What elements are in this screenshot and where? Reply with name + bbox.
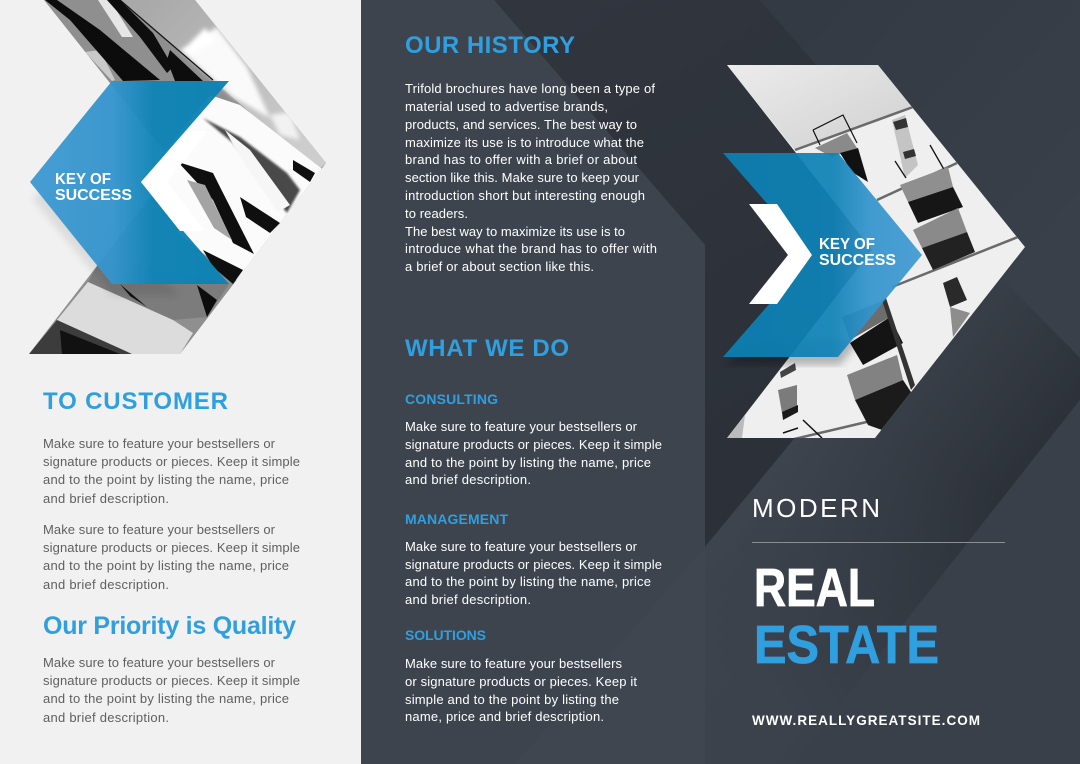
subheading: management: MANAGEMENT xyxy=(405,511,508,527)
divider rule xyxy=(752,542,1005,543)
left photo: building chevron xyxy=(20,0,330,360)
text block: solutions: simple and to the point by listing the xyxy=(405,692,619,707)
text block: consulting: Make sure to feature your bestsellers or xyxy=(405,419,638,434)
text block: history: material used to advertise brands, xyxy=(405,99,608,114)
text block: customer paragraph two: Make sure to feature your bestsellers or xyxy=(43,522,276,537)
panel: left background xyxy=(0,0,361,764)
text block: history: Trifold brochures have long been a type of xyxy=(405,81,655,96)
blue arrow shadow left xyxy=(32,180,180,296)
heading: what we do: WHAT WE DO xyxy=(405,335,569,362)
title: real: REAL xyxy=(754,558,875,618)
text block: management: and to the point by listing the name, price xyxy=(405,574,651,589)
subheading: consulting: CONSULTING xyxy=(405,391,498,407)
blue arrow left xyxy=(30,81,229,284)
text block: history: maximize its use is to introduce what the xyxy=(405,135,644,150)
text block: quality paragraph: signature products or pieces. Keep it simple xyxy=(43,673,300,688)
text block: quality paragraph xyxy=(43,655,300,725)
text block: customer paragraph two: and brief description. xyxy=(43,577,169,592)
text block: history: section like this. Make sure to keep your xyxy=(405,170,640,185)
text block: customer paragraph one: Make sure to feature your bestsellers or xyxy=(43,436,276,451)
label: key of success left: SUCCESS xyxy=(55,187,132,204)
subheading: solutions: SOLUTIONS xyxy=(405,627,486,643)
right photo: apartment balconies chevron xyxy=(720,60,1030,445)
label: key of success right xyxy=(819,236,896,269)
text block: customer paragraph two: and to the point by listing the name, price xyxy=(43,558,289,573)
text block: history: The best way to maximize its use is to xyxy=(405,224,625,239)
blue arrow shadow right xyxy=(723,340,860,365)
text block: management: Make sure to feature your bestsellers or xyxy=(405,539,638,554)
text block: customer paragraph one: and to the point by listing the name, price xyxy=(43,472,289,487)
heading: to customer: TO CUSTOMER xyxy=(43,388,228,415)
label: key of success left: KEY OF xyxy=(55,171,111,188)
text block: history: a brief or about section like this. xyxy=(405,259,594,274)
text block: customer paragraph one: and brief description. xyxy=(43,491,169,506)
text block: solutions: Make sure to feature your bestsellers xyxy=(405,656,622,671)
text block: history: products, and services. The best way to xyxy=(405,117,637,132)
text block: solutions xyxy=(405,656,637,724)
white chevron right xyxy=(749,204,812,304)
label: key of success left xyxy=(55,171,132,204)
text block: consulting: and brief description. xyxy=(405,472,531,487)
title: modern: MODERN xyxy=(752,493,880,523)
text block: solutions: name, price and brief description. xyxy=(405,709,604,724)
text block: history: to readers. xyxy=(405,206,468,221)
text block: quality paragraph: and to the point by listing the name, price xyxy=(43,691,289,706)
text block: history xyxy=(405,81,657,274)
text block: customer paragraph one xyxy=(43,436,300,506)
text block: history: introduce what the brand has to offer with xyxy=(405,241,657,256)
text block: customer paragraph two: signature products or pieces. Keep it simple xyxy=(43,540,300,555)
panel: dark background with facets xyxy=(361,0,1080,764)
white chevron left xyxy=(141,131,208,231)
label: key of success right: SUCCESS xyxy=(819,252,896,269)
text block: consulting: and to the point by listing the name, price xyxy=(405,455,651,470)
label: key of success right: KEY OF xyxy=(819,236,875,253)
heading: our history: OUR HISTORY xyxy=(405,32,575,59)
blue arrow right xyxy=(723,153,922,357)
text block: quality paragraph: Make sure to feature your bestsellers or xyxy=(43,655,276,670)
heading: our priority is quality: Our Priority is Quality xyxy=(43,612,296,640)
text block: consulting: signature products or pieces. Keep it simple xyxy=(405,437,662,452)
text block: customer paragraph one: signature products or pieces. Keep it simple xyxy=(43,454,300,469)
website address: WWW.REALLYGREATSITE.COM xyxy=(752,713,980,728)
text block: history: brand has to offer with a brief or about xyxy=(405,152,637,167)
title: estate: ESTATE xyxy=(754,615,939,675)
text block: management: and brief description. xyxy=(405,592,531,607)
text block: quality paragraph: and brief description. xyxy=(43,710,169,725)
text block: management: signature products or pieces. Keep it simple xyxy=(405,557,662,572)
text block: customer paragraph two xyxy=(43,522,300,592)
text block: consulting xyxy=(405,419,662,487)
text block: history: introduction short but interesting enough xyxy=(405,188,645,203)
text block: management xyxy=(405,539,662,607)
text block: solutions: or signature products or pieces. Keep it xyxy=(405,674,637,689)
